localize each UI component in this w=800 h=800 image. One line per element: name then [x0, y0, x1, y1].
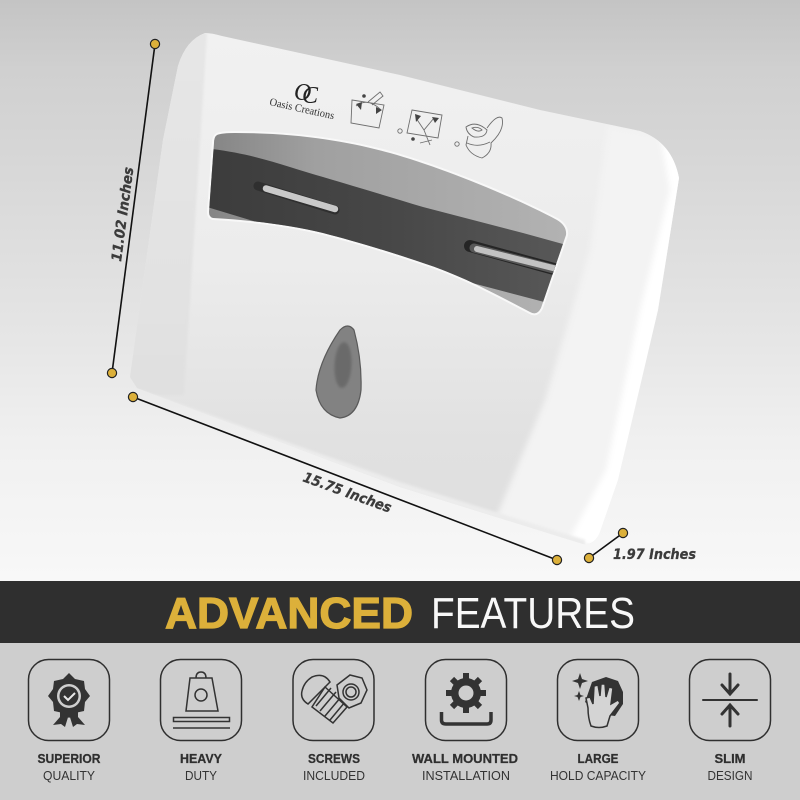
icon: weight [173, 672, 230, 728]
brand logo: Oasis Creations [268, 96, 335, 122]
window left slot [258, 186, 335, 210]
dimension: depth 1.97 inches: 1.97 Inches [613, 547, 696, 563]
heading: FEATURES [431, 589, 635, 638]
icon: screw and nut [302, 675, 367, 723]
drop window inner shade [333, 342, 353, 388]
window rim [209, 133, 566, 313]
feature: wall mounted: INSTALLATION [422, 768, 510, 783]
feature: heavy duty: HEAVY [180, 751, 222, 766]
dispenser body [130, 33, 679, 544]
feature: slim design: DESIGN [708, 768, 752, 783]
feature: large hold capacity [550, 660, 646, 783]
dimension: width 15.75 inches [128, 392, 562, 565]
feature: superior quality [28, 660, 110, 783]
features panel [0, 643, 800, 800]
instruction 3 [455, 117, 503, 158]
feature: screws included: SCREWS [308, 751, 360, 766]
feature: screws included [293, 660, 374, 783]
icon: hand with sparkles [572, 673, 623, 728]
feature: wall mounted: WALL MOUNTED [412, 751, 518, 766]
dimension: height 11.02 inches [107, 39, 160, 378]
dimension: width 15.75 inches: 15.75 Inches [301, 470, 393, 517]
heading [165, 589, 635, 638]
instruction icons [351, 92, 503, 158]
brand logo: O [294, 80, 311, 106]
product: dispenser [120, 25, 690, 560]
feature: large hold capacity: LARGE [578, 751, 619, 766]
dimension: height 11.02 inches: 11.02 Inches [109, 166, 137, 263]
features banner [0, 581, 800, 643]
dispenser drop window [316, 326, 361, 418]
instruction 2 [398, 110, 442, 145]
icon: compress arrows [703, 674, 757, 726]
dimension: depth 1.97 inches [584, 528, 696, 563]
heading: ADVANCED [165, 589, 413, 638]
feature: screws included: INCLUDED [303, 768, 365, 783]
feature: superior quality: QUALITY [43, 768, 95, 783]
icon: gear over tray [442, 673, 491, 724]
dispenser shading and highlights [120, 25, 690, 560]
feature: slim design: SLIM [714, 751, 746, 766]
feature: heavy duty: DUTY [185, 768, 217, 783]
feature: large hold capacity: HOLD CAPACITY [550, 768, 646, 783]
brand logo [268, 80, 335, 122]
window right slot [470, 246, 565, 272]
instruction 1 [351, 92, 384, 128]
feature: wall mounted [412, 660, 518, 783]
dispenser window [209, 133, 566, 314]
feature: slim design [690, 660, 770, 783]
background [0, 0, 800, 581]
feature: heavy duty [160, 660, 242, 783]
feature: superior quality: SUPERIOR [38, 751, 101, 766]
brand logo: C [302, 83, 319, 109]
icon: award badge [48, 673, 90, 727]
window dark band [207, 149, 570, 303]
